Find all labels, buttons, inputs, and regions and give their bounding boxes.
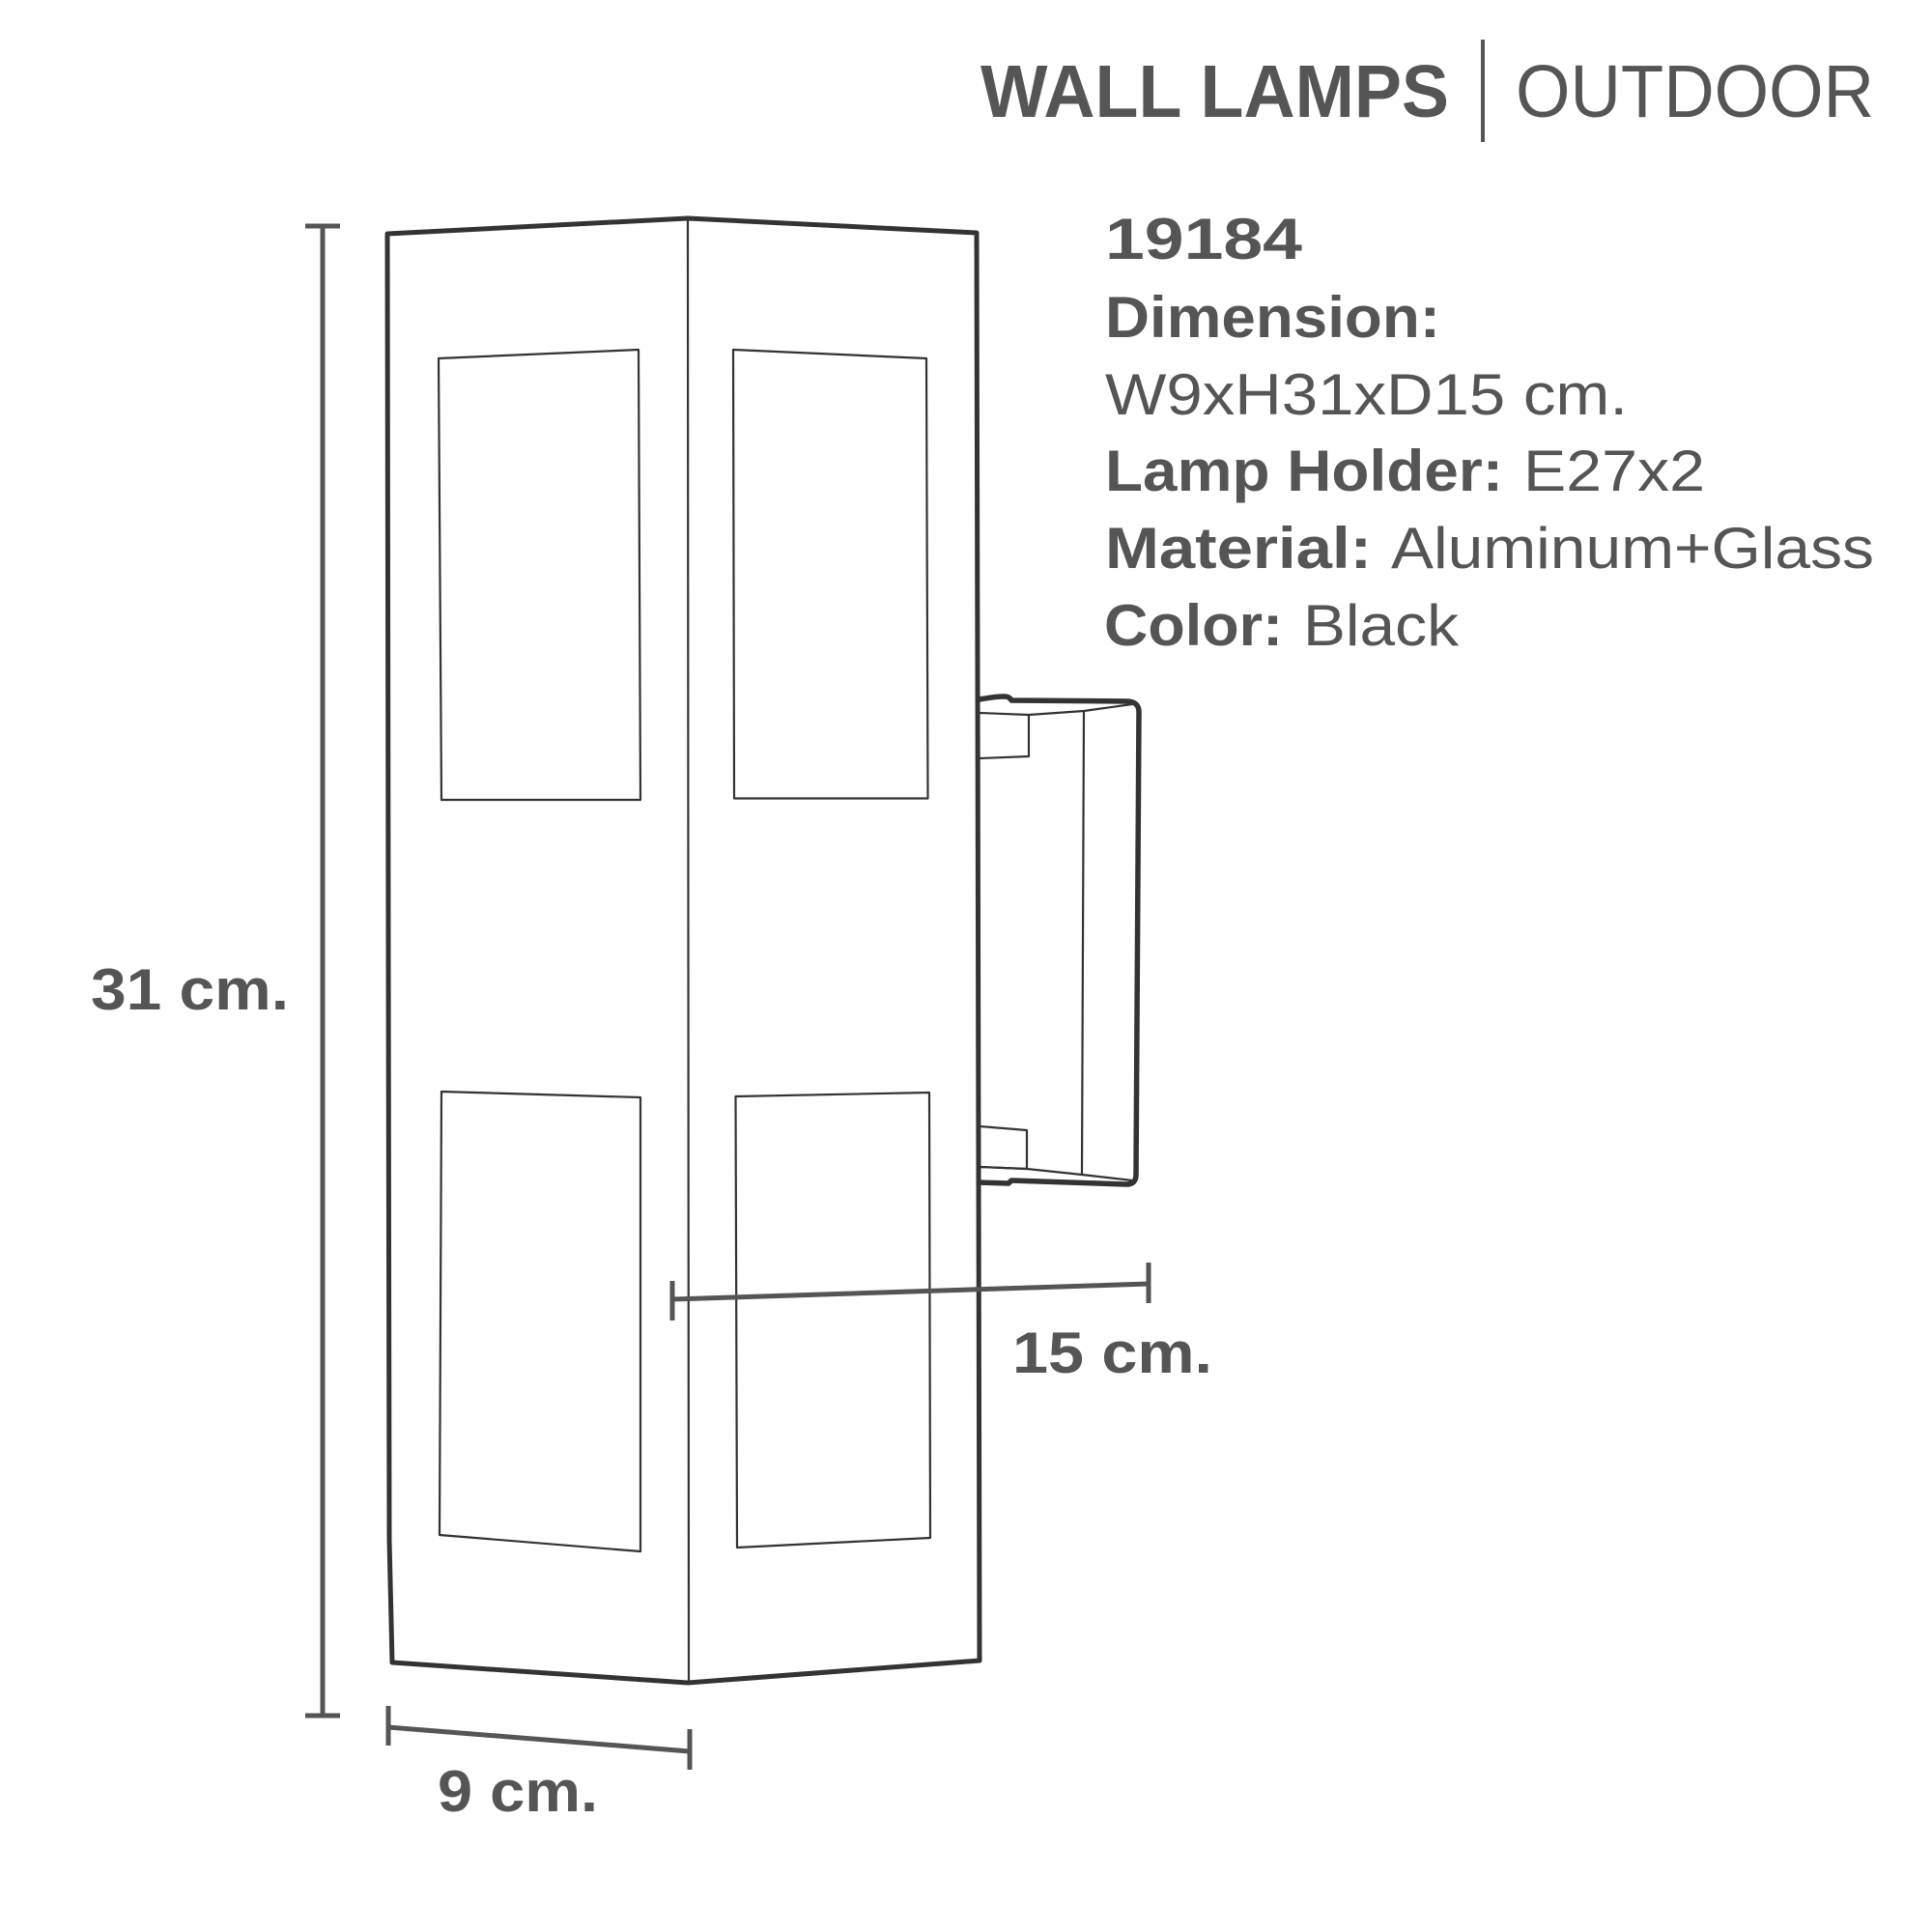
window: bottom right (736, 1093, 930, 1548)
title: OUTDOOR (1516, 50, 1874, 133)
title: WALL LAMPS (980, 50, 1449, 133)
width dimension: 9 cm. (438, 1759, 598, 1824)
width dimension (388, 1706, 690, 1824)
material spec: Aluminum+Glass (1391, 516, 1874, 581)
color spec: Black (1303, 593, 1460, 658)
depth dimension (672, 1263, 1212, 1385)
lamp holder spec: E27x2 (1523, 439, 1705, 503)
window: top right (733, 350, 927, 798)
specifications text block (1104, 207, 1874, 658)
dimension label: Dimension: (1105, 285, 1440, 350)
center edge (688, 218, 689, 1683)
material spec: Material: (1105, 516, 1372, 581)
lamp holder spec: Lamp Holder: (1105, 439, 1503, 503)
model number: 19184 (1105, 207, 1303, 271)
lamp holder spec (1105, 439, 1705, 503)
lamp line drawing (387, 218, 1139, 1683)
material spec (1105, 516, 1874, 581)
color spec (1104, 593, 1460, 658)
depth dimension: 15 cm. (1012, 1321, 1212, 1385)
title (980, 40, 1874, 142)
dimension value: W9xH31xD15 cm. (1105, 362, 1628, 427)
height dimension: 31 cm. (91, 957, 289, 1022)
lamp body outline (387, 218, 980, 1683)
window: bottom left (440, 1092, 640, 1551)
wall bracket (980, 696, 1139, 1184)
color spec: Color: (1104, 593, 1283, 658)
window: top left (439, 350, 640, 800)
